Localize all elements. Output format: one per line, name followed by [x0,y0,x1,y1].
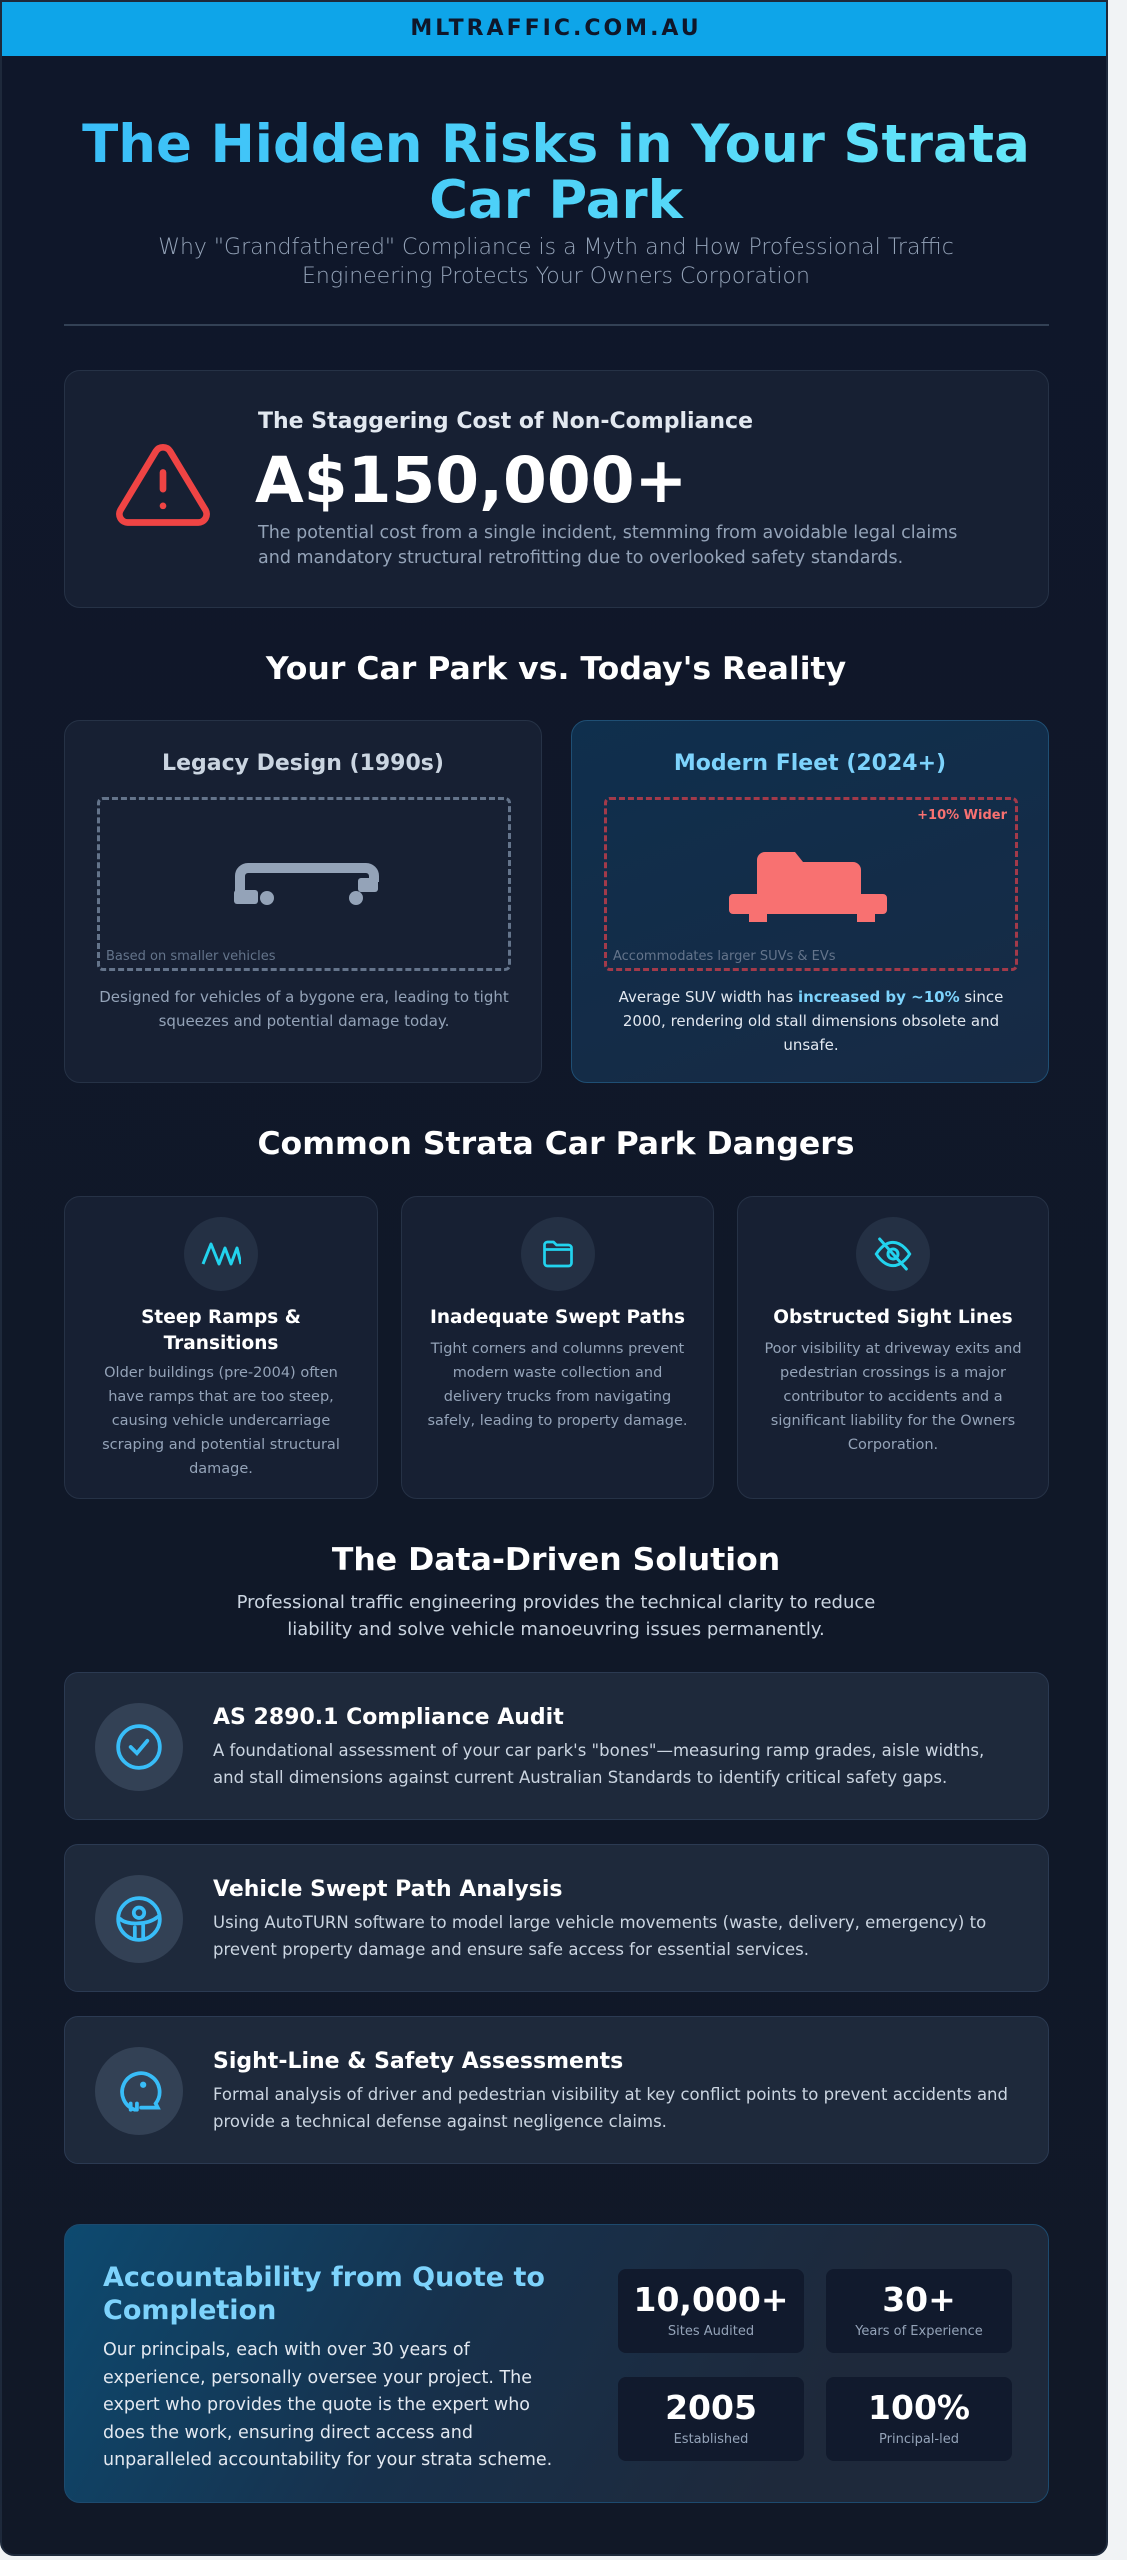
panel: legacy design [64,720,542,1083]
panel: swept paths: Inadequate Swept Paths [430,1307,685,1328]
panel: sight-line assessments [64,2016,1049,2164]
subtitle: Why "Grandfathered" Compliance is a Myth and How Professional Traffic Engineering Protects Your Owners Corporation [158,235,954,289]
icon: ramps [184,1217,258,1291]
heading: solution: The Data-Driven Solution [332,1542,780,1578]
icon: check circle [95,1703,183,1791]
stat: established: 2005 [665,2388,757,2427]
panel: modern fleet: Modern Fleet (2024+) [674,751,946,776]
panel: swept path analysis: Using AutoTURN software to model large vehicle movements (waste, delivery, emergency) to prevent property damage and ensure safe access for essential services. [213,1913,986,1959]
icon: folder [520,1217,594,1291]
big number: A$150,000+ [255,444,687,517]
stat: principal-led [826,2377,1012,2461]
panel: modern fleet: +10% Wider [917,808,1007,823]
panel: steep ramps: Steep Ramps & Transitions [141,1307,301,1354]
panel: steep ramps [64,1196,378,1499]
icon: assessment [95,2047,183,2135]
panel: modern fleet [571,720,1049,1083]
panel: modern fleet: Accommodates larger SUVs & EVs [613,949,836,964]
panel: compliance audit: AS 2890.1 Compliance Audit [213,1705,564,1730]
panel: accountability [64,2224,1049,2503]
panel: legacy design: Designed for vehicles of a bygone era, leading to tight squeezes and potential damage today. [99,988,509,1030]
panel: swept paths: Tight corners and columns prevent modern waste collection and delivery trucks from navigating safely, leading to property damage. [427,1341,688,1429]
panel: sight-line assessments: Formal analysis of driver and pedestrian visibility at key conflict points to prevent accidents and provide a technical defense against negligence claims. [213,2085,1008,2131]
panel: legacy design: Legacy Design (1990s) [162,751,444,776]
panel: cost of non-compliance [64,370,1049,608]
panel: compliance audit [64,1672,1049,1820]
panel: compliance audit: A foundational assessment of your car park's "bones"—measuring ramp grades, aisle widths, and stall dimensions against current Australian Standards to identify critical safety gaps. [213,1741,984,1787]
heading: dangers: Common Strata Car Park Dangers [257,1126,855,1162]
stat: sites audited: 10,000+ [634,2280,788,2319]
stat: sites audited [618,2269,804,2353]
heading: comparison: Your Car Park vs. Today's Reality [266,651,846,687]
top bar: MLTRAFFIC.COM.AU [410,16,702,41]
stat: years [826,2269,1012,2353]
panel: swept path analysis [64,1844,1049,1992]
panel: modern fleet: Average SUV width has increased by ~10% since 2000, rendering old stall dimensions obsolete and unsafe. [619,988,1003,1054]
panel: swept paths [401,1196,714,1499]
panel: sight lines: Obstructed Sight Lines [773,1307,1013,1328]
stat: sites audited: Sites Audited [668,2324,754,2339]
stat: principal-led: 100% [868,2388,970,2427]
heading: The Staggering Cost of Non-Compliance [258,409,753,434]
icon: large SUV [729,852,887,922]
panel: sight-line assessments: Sight-Line & Safety Assessments [213,2049,623,2074]
icon: warning [116,444,210,526]
top bar [2,2,1110,56]
icon: swept path [95,1875,183,1963]
stat: principal-led: Principal-led [879,2432,959,2447]
panel: sight lines [737,1196,1049,1499]
description: The potential cost from a single incident, stemming from avoidable legal claims and mandatory structural retrofitting due to overlooked safety standards. [258,523,957,568]
stat: established: Established [674,2432,748,2447]
panel: swept path analysis: Vehicle Swept Path Analysis [213,1877,562,1902]
panel: sight lines: Poor visibility at driveway exits and pedestrian crossings is a major contributor to accidents and a significant liability for the Owners Corporation. [764,1341,1022,1453]
text: solution intro: Professional traffic engineering provides the technical clarity to reduce liability and solve vehicle manoeuvring issues permanently. [237,1592,875,1640]
icon: small car [234,863,379,905]
stat: years: 30+ [882,2280,956,2319]
stat: established [618,2377,804,2461]
panel: legacy design: Based on smaller vehicles [106,949,276,964]
panel: steep ramps: Older buildings (pre-2004) often have ramps that are too steep, causing vehicle undercarriage scraping and potential structural damage. [102,1365,340,1477]
icon: eye off [856,1217,930,1291]
heading: Accountability from Quote to Completion [103,2262,545,2326]
body text: Our principals, each with over 30 years of experience, personally oversee your project. The expert who provides the quote is the expert who does the work, ensuring direct access and unparalleled accountability for your strata scheme. [103,2340,552,2470]
title: The Hidden Risks in Your Strata Car Park [82,114,1030,231]
stat: years: Years of Experience [855,2324,983,2339]
